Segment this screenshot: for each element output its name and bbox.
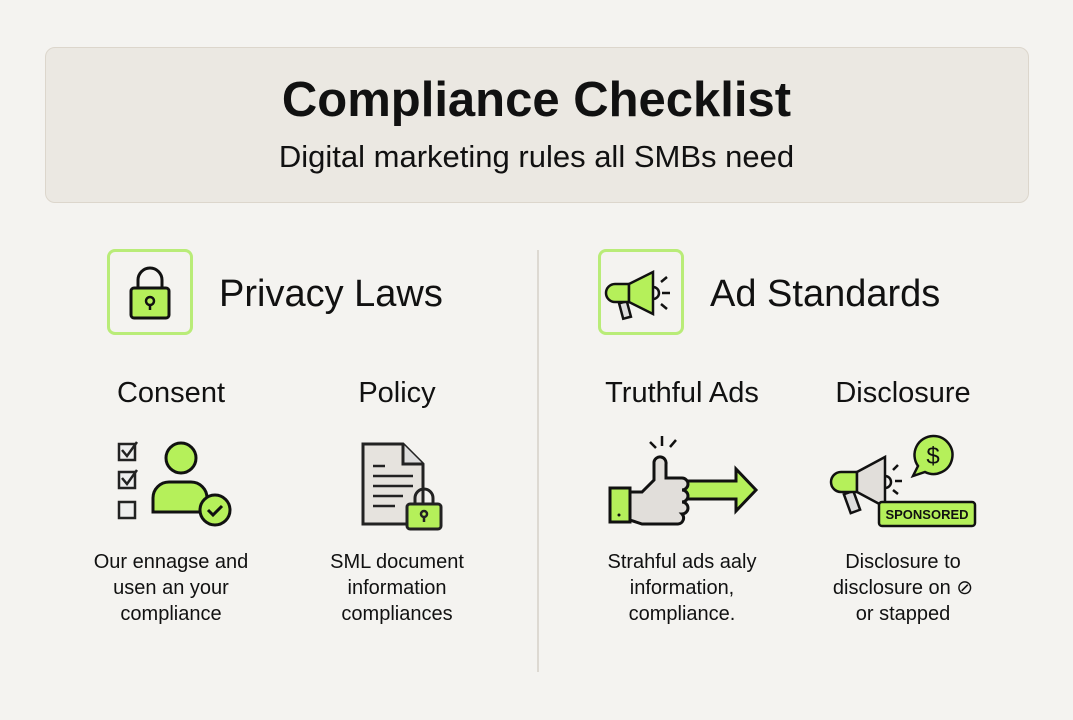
truthful ads column [605, 377, 759, 625]
heading: Ad Standards: Ad Standards [710, 273, 940, 315]
icon: lock box [107, 249, 193, 335]
consent column [94, 377, 248, 625]
subtitle: Digital marketing rules all SMBs need [279, 139, 794, 174]
disclosure text: or stapped [856, 603, 950, 625]
header panel [45, 47, 1029, 203]
policy text: information [348, 577, 446, 599]
icon: megaphone box [598, 249, 684, 335]
policy text: SML document [330, 551, 464, 573]
icon: checklist user [118, 441, 232, 526]
disclosure column: Disclosure [835, 377, 971, 409]
truthful text: information, [630, 577, 734, 599]
consent text: usen an your [113, 577, 229, 599]
truthful text: compliance. [629, 603, 735, 625]
disclosure text: disclosure on ⊘ [833, 577, 973, 599]
policy text [330, 551, 464, 625]
heading: Privacy Laws: Privacy Laws [219, 273, 443, 315]
policy column [330, 377, 464, 625]
title: Compliance Checklist [282, 73, 791, 127]
consent text: compliance [120, 603, 222, 625]
vertical divider [537, 250, 539, 672]
consent column: Consent [117, 377, 225, 409]
policy text: compliances [341, 603, 453, 625]
policy column: Policy [358, 377, 436, 409]
disclosure text [833, 551, 973, 625]
disclosure column [830, 377, 976, 625]
consent text [94, 551, 248, 625]
truthful ads column: Truthful Ads [605, 377, 759, 409]
icon: thumbs up arrow [608, 436, 758, 526]
disclosure text: Disclosure to [845, 551, 961, 573]
icon: megaphone sponsored: $ [926, 443, 940, 470]
truthful text: Strahful ads aaly [608, 551, 756, 573]
icon: document lock [362, 442, 442, 530]
icon: megaphone sponsored: SPONSORED [885, 507, 969, 522]
truthful text [608, 551, 756, 625]
consent text: Our ennagse and [94, 551, 248, 573]
icon: megaphone sponsored [830, 434, 976, 528]
